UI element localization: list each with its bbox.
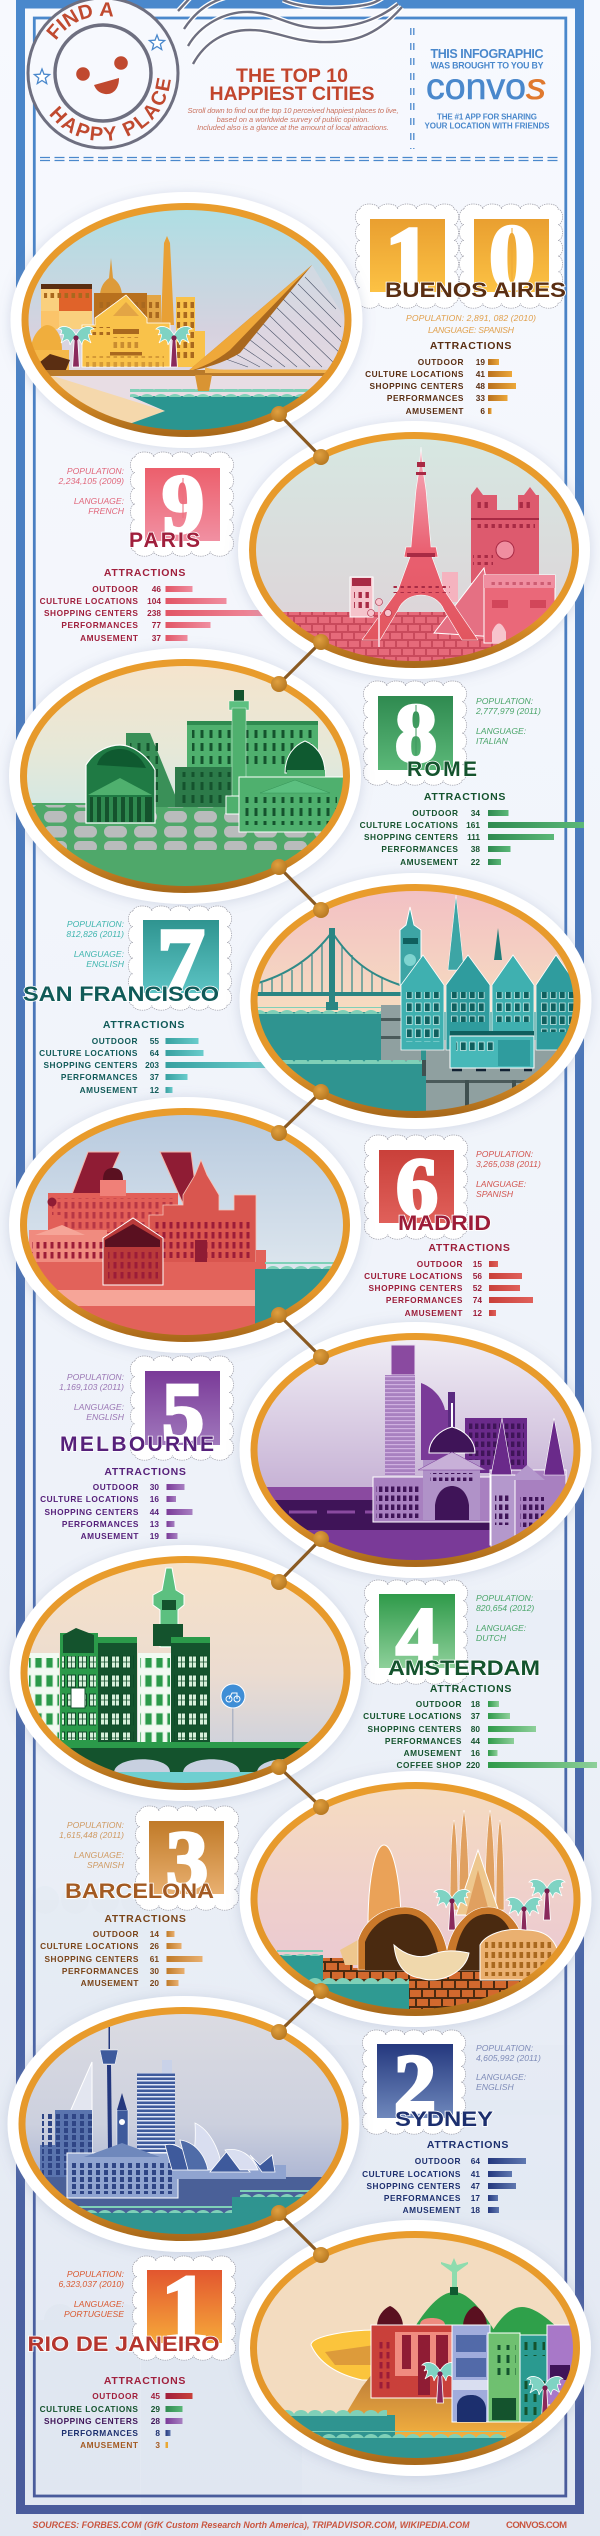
- header divider: [40, 28, 561, 160]
- attractions chart: [40, 1466, 192, 1541]
- attractions chart: OUTDOOR: [93, 1929, 139, 1939]
- attractions chart: SHOPPING CENTERS: [369, 381, 464, 391]
- attractions chart: ATTRACTIONS: [104, 567, 186, 579]
- population and language: ENGLISH: [476, 2082, 515, 2092]
- attractions chart: 34: [471, 808, 480, 818]
- attractions chart: SHOPPING CENTERS: [44, 1507, 139, 1517]
- city name: AMSTERDAM: [388, 1657, 540, 1680]
- sponsor block: convos: YOUR LOCATION WITH FRIENDS: [424, 122, 550, 130]
- vignette: Madrid skyline: [9, 1097, 361, 1353]
- attractions chart: ATTRACTIONS: [104, 1913, 187, 1925]
- city name: ROME: [407, 758, 477, 781]
- panel: Amsterdam: [10, 1545, 597, 1801]
- footer: sources: SOURCES: FORBES.COM (GfK Custom Research North America), TRIPADVISOR.COM, WIKIPEDIA.COM: [32, 2520, 471, 2531]
- attractions chart: CULTURE LOCATIONS: [40, 596, 138, 606]
- attractions chart: 30: [150, 1966, 159, 1976]
- attractions chart: 12: [150, 1085, 159, 1095]
- attractions chart: AMUSEMENT: [81, 1978, 139, 1988]
- attractions chart: CULTURE LOCATIONS: [40, 1941, 139, 1951]
- population and language: POPULATION:: [476, 696, 534, 706]
- population and language: PORTUGUESE: [64, 2309, 124, 2319]
- attractions chart: AMUSEMENT: [80, 2440, 138, 2450]
- attractions chart: 44: [150, 1507, 159, 1517]
- panel: Madrid: [9, 1097, 541, 1353]
- stamp: number 5: [130, 1356, 234, 1460]
- attractions chart: 80: [471, 1724, 480, 1734]
- attractions chart: CULTURE LOCATIONS: [40, 1494, 139, 1504]
- attractions chart: COFFEE SHOP: [396, 1760, 462, 1770]
- population and language: FRENCH: [88, 506, 125, 516]
- attractions chart: PERFORMANCES: [61, 620, 138, 630]
- stamp: number 2: 2: [394, 2038, 436, 2131]
- attractions chart: 52: [473, 1283, 482, 1293]
- badge: find a happy place stamp: FIND A: [46, 2, 113, 40]
- city name: PARIS: [129, 529, 200, 552]
- population and language: POPULATION: 2,891, 082 (2010): [406, 313, 536, 323]
- population and language: POPULATION:: [67, 466, 125, 476]
- population and language: 812,826 (2011): [66, 929, 124, 939]
- attractions chart: 26: [150, 1941, 159, 1951]
- stamp: number 7: [128, 906, 232, 1015]
- attractions chart: ATTRACTIONS: [427, 2139, 509, 2151]
- attractions chart: [365, 340, 516, 416]
- attractions chart: OUTDOOR: [92, 584, 138, 594]
- attractions chart: 46: [152, 584, 161, 594]
- attractions chart: OUTDOOR: [417, 1259, 463, 1269]
- intro text: Scroll down to find out the top 10 perceived happiest places to live,: [188, 106, 398, 115]
- population and language: 2,234,105 (2009): [58, 476, 124, 486]
- attractions chart: [360, 791, 584, 867]
- attractions chart: 37: [471, 1711, 480, 1721]
- vignette: Sydney skyline: [8, 1996, 360, 2252]
- intro text: [188, 106, 398, 132]
- attractions chart: ATTRACTIONS: [104, 2375, 186, 2387]
- panel: Rio de Janeiro: [28, 2220, 591, 2476]
- attractions chart: OUTDOOR: [92, 1036, 138, 1046]
- population and language: [59, 1372, 125, 1422]
- stamp: number 3: [135, 1806, 239, 1910]
- attractions chart: 104: [147, 596, 161, 606]
- city name: SAN FRANCISCO: [23, 983, 219, 1006]
- stamps: number 10: 1: [385, 208, 431, 310]
- attractions chart: ATTRACTIONS: [103, 1019, 185, 1031]
- title: HAPPIEST CITIES: [210, 83, 374, 105]
- panel: Melbourne: [40, 1322, 592, 1578]
- attractions chart: 30: [150, 1482, 159, 1492]
- attractions chart: [362, 2139, 526, 2215]
- attractions chart: SHOPPING CENTERS: [367, 1724, 462, 1734]
- population and language: 4,605,992 (2011): [476, 2053, 541, 2063]
- population and language: ENGLISH: [86, 1412, 125, 1422]
- vignette: Rome skyline: [9, 648, 364, 904]
- attractions chart: OUTDOOR: [415, 2156, 461, 2166]
- stamp: number 4: 4: [396, 1591, 438, 1684]
- attractions chart: 6: [480, 406, 485, 416]
- attractions chart: AMUSEMENT: [405, 1308, 463, 1318]
- city name: RIO DE JANEIRO: [28, 2333, 220, 2356]
- attractions chart: 74: [473, 1295, 482, 1305]
- attractions chart: 20: [150, 1978, 159, 1988]
- population and language: LANGUAGE:: [74, 1850, 125, 1860]
- attractions chart: 22: [471, 857, 480, 867]
- attractions chart: SHOPPING CENTERS: [43, 1060, 138, 1070]
- sponsor block: convos: THIS INFOGRAPHIC: [430, 47, 544, 61]
- attractions chart: PERFORMANCES: [386, 1295, 463, 1305]
- attractions chart: 12: [473, 1308, 482, 1318]
- badge: find a happy place stamp: [26, 0, 180, 150]
- stamp: number 9: [130, 452, 234, 556]
- attractions chart: 17: [471, 2193, 480, 2203]
- population and language: LANGUAGE:: [476, 726, 527, 736]
- panel: Sydney: [8, 1996, 541, 2252]
- attractions chart: ATTRACTIONS: [430, 1683, 512, 1695]
- attractions chart: OUTDOOR: [416, 1699, 462, 1709]
- stamp: number 4: [364, 1580, 468, 1684]
- attractions chart: 161: [466, 820, 480, 830]
- population and language: 1,169,103 (2011): [59, 1382, 124, 1392]
- attractions chart: OUTDOOR: [92, 2391, 138, 2401]
- attractions chart: 37: [150, 1072, 159, 1082]
- attractions chart: [40, 1913, 202, 1988]
- attractions chart: AMUSEMENT: [403, 2205, 461, 2215]
- attractions chart: 41: [471, 2169, 480, 2179]
- attractions chart: 15: [473, 1259, 482, 1269]
- attractions chart: 18: [471, 1699, 480, 1709]
- vignette: Melbourne skyline: [240, 1322, 592, 1578]
- stamp: number 2: [362, 2030, 466, 2134]
- attractions chart: PERFORMANCES: [381, 844, 458, 854]
- attractions chart: 55: [150, 1036, 159, 1046]
- stamp: number 6: 6: [396, 1141, 438, 1234]
- attractions chart: PERFORMANCES: [62, 1519, 139, 1529]
- attractions chart: AMUSEMENT: [80, 633, 138, 643]
- attractions chart: 14: [150, 1929, 159, 1939]
- attractions chart: SHOPPING CENTERS: [364, 832, 458, 842]
- attractions chart: SHOPPING CENTERS: [368, 1283, 463, 1293]
- attractions chart: CULTURE LOCATIONS: [362, 2169, 461, 2179]
- panel: Barcelona: [40, 1771, 592, 2027]
- attractions chart: PERFORMANCES: [385, 1736, 462, 1746]
- population and language: [66, 919, 125, 969]
- sponsor block: convos: THE #1 APP FOR SHARING: [437, 112, 537, 122]
- attractions chart: AMUSEMENT: [404, 1748, 462, 1758]
- population and language: [58, 466, 125, 516]
- attractions chart: 45: [151, 2391, 160, 2401]
- city name: BARCELONA: [65, 1880, 214, 1903]
- sponsor block: convos: [424, 47, 550, 130]
- attractions chart: OUTDOOR: [93, 1482, 139, 1492]
- vignette: San Francisco skyline: [240, 873, 592, 1129]
- population and language: LANGUAGE:: [476, 1623, 527, 1633]
- sponsor block: convos: s: [526, 66, 546, 107]
- badge: find a happy place stamp: HAPPY PLACE: [50, 78, 171, 141]
- population and language: 3,265,038 (2011): [476, 1159, 541, 1169]
- population and language: LANGUAGE:: [74, 949, 125, 959]
- attractions chart: 28: [151, 2416, 160, 2426]
- stamp: number 8: 8: [395, 687, 437, 780]
- vignette: Amsterdam skyline: [10, 1545, 362, 1801]
- attractions chart: 48: [476, 381, 485, 391]
- population and language: POPULATION:: [476, 1593, 534, 1603]
- stamp: number 5: 5: [162, 1366, 204, 1459]
- attractions chart: CULTURE LOCATIONS: [40, 2404, 138, 2414]
- attractions chart: AMUSEMENT: [400, 857, 458, 867]
- population and language: POPULATION:: [476, 1149, 534, 1159]
- attractions chart: 64: [471, 2156, 480, 2166]
- attractions chart: 47: [471, 2181, 480, 2191]
- population and language: [406, 313, 536, 335]
- population and language: 6,323,037 (2010): [59, 2279, 124, 2289]
- attractions chart: 56: [473, 1271, 482, 1281]
- vignette: Buenos Aires skyline: [10, 192, 362, 448]
- intro text: Included also is a glance at the amount of local attractions.: [197, 123, 389, 132]
- population and language: LANGUAGE:: [476, 1179, 527, 1189]
- sponsor block: convos: WAS BROUGHT TO YOU BY: [430, 60, 544, 70]
- stamp: number 8: [363, 681, 467, 785]
- population and language: [59, 1820, 125, 1870]
- attractions chart: PERFORMANCES: [61, 2428, 138, 2438]
- attractions chart: 13: [150, 1519, 159, 1529]
- attractions chart: ATTRACTIONS: [428, 1242, 511, 1254]
- population and language: POPULATION:: [67, 919, 125, 929]
- attractions chart: 19: [150, 1531, 159, 1541]
- attractions chart: ATTRACTIONS: [104, 1466, 187, 1478]
- stamp: number 3: 3: [166, 1814, 208, 1907]
- population and language: ITALIAN: [476, 736, 509, 746]
- stamp: number 1: [132, 2255, 236, 2362]
- title: THE TOP 10: [236, 65, 348, 87]
- attractions chart: [39, 1019, 266, 1095]
- population and language: POPULATION:: [476, 2043, 534, 2053]
- attractions chart: SHOPPING CENTERS: [44, 608, 138, 618]
- attractions chart: 29: [151, 2404, 160, 2414]
- population and language: [475, 696, 541, 746]
- population and language: 820,654 (2012): [476, 1603, 534, 1613]
- city name: BUENOS AIRES: [385, 279, 566, 302]
- title: [210, 65, 374, 105]
- population and language: [476, 2043, 541, 2092]
- population and language: POPULATION:: [67, 2269, 125, 2279]
- stamp: number 1: 1: [161, 2255, 209, 2362]
- population and language: 2,777,979 (2011): [475, 706, 541, 716]
- attractions chart: 77: [152, 620, 161, 630]
- panel: San Francisco: [23, 873, 592, 1129]
- population and language: SPANISH: [87, 1860, 125, 1870]
- attractions chart: AMUSEMENT: [406, 406, 464, 416]
- attractions chart: 38: [471, 844, 480, 854]
- population and language: LANGUAGE:: [74, 496, 125, 506]
- attractions chart: 44: [471, 1736, 480, 1746]
- attractions chart: 41: [476, 369, 485, 379]
- population and language: LANGUAGE: SPANISH: [428, 325, 515, 335]
- stamps: number 10: 0: [489, 206, 535, 308]
- population and language: [59, 2269, 125, 2319]
- attractions chart: CULTURE LOCATIONS: [365, 369, 464, 379]
- stamp: number 6: [364, 1135, 468, 1239]
- stamps: number 10: [355, 204, 563, 310]
- attractions chart: 16: [471, 1748, 480, 1758]
- attractions chart: PERFORMANCES: [387, 393, 464, 403]
- population and language: POPULATION:: [67, 1372, 125, 1382]
- population and language: 1,615,448 (2011): [59, 1830, 124, 1840]
- population and language: LANGUAGE:: [476, 2072, 527, 2082]
- attractions chart: [364, 1242, 533, 1318]
- sponsor block: convos: convo: [426, 66, 526, 107]
- attractions chart: OUTDOOR: [418, 357, 464, 367]
- attractions chart: CULTURE LOCATIONS: [364, 1271, 463, 1281]
- population and language: [476, 1593, 534, 1643]
- attractions chart: AMUSEMENT: [80, 1085, 138, 1095]
- attractions chart: [40, 2375, 192, 2450]
- attractions chart: PERFORMANCES: [61, 1072, 138, 1082]
- city name: SYDNEY: [395, 2108, 493, 2131]
- vignette: Paris skyline: [238, 421, 590, 679]
- attractions chart: 18: [471, 2205, 480, 2215]
- attractions chart: CULTURE LOCATIONS: [363, 1711, 462, 1721]
- attractions chart: 203: [145, 1060, 159, 1070]
- attractions chart: 33: [476, 393, 485, 403]
- attractions chart: ATTRACTIONS: [430, 340, 512, 352]
- stamp: number 7: 7: [157, 908, 205, 1015]
- population and language: DUTCH: [476, 1633, 507, 1643]
- attractions chart: PERFORMANCES: [62, 1966, 139, 1976]
- attractions chart: 111: [467, 832, 480, 842]
- attractions chart: 238: [147, 608, 161, 618]
- footer: website: CONVOS.COM: [506, 2520, 567, 2531]
- attractions chart: 8: [155, 2428, 160, 2438]
- population and language: LANGUAGE:: [74, 2299, 125, 2309]
- attractions chart: 61: [150, 1954, 159, 1964]
- attractions chart: PERFORMANCES: [384, 2193, 461, 2203]
- attractions chart: CULTURE LOCATIONS: [360, 820, 458, 830]
- attractions chart: 16: [150, 1494, 159, 1504]
- attractions chart: SHOPPING CENTERS: [44, 2416, 138, 2426]
- attractions chart: SHOPPING CENTERS: [44, 1954, 139, 1964]
- population and language: SPANISH: [476, 1189, 514, 1199]
- population and language: [476, 1149, 541, 1199]
- attractions chart: 19: [476, 357, 485, 367]
- stamp: number 9: 9: [162, 458, 204, 551]
- attractions chart: AMUSEMENT: [81, 1531, 139, 1541]
- attractions chart: 37: [152, 633, 161, 643]
- panel: Rome: [9, 648, 584, 904]
- population and language: POPULATION:: [67, 1820, 125, 1830]
- postmark wavy lines: [178, 0, 402, 64]
- attractions chart: 64: [150, 1048, 159, 1058]
- panel: Buenos Aires: [10, 192, 566, 448]
- population and language: ENGLISH: [86, 959, 125, 969]
- vignette: Barcelona skyline: [240, 1771, 592, 2027]
- intro text: based on a worldwide survey of public opinion.: [217, 115, 369, 124]
- attractions chart: CULTURE LOCATIONS: [39, 1048, 138, 1058]
- panel: Paris: [40, 421, 590, 679]
- connectors between city vignettes: [271, 406, 329, 2263]
- population and language: LANGUAGE:: [74, 1402, 125, 1412]
- attractions chart: SHOPPING CENTERS: [366, 2181, 461, 2191]
- attractions chart: OUTDOOR: [412, 808, 458, 818]
- attractions chart: ATTRACTIONS: [424, 791, 506, 803]
- attractions chart: 3: [155, 2440, 160, 2450]
- attractions chart: [363, 1683, 597, 1770]
- city name: MADRID: [398, 1212, 491, 1235]
- attractions chart: 220: [466, 1760, 480, 1770]
- vignette: Rio de Janeiro skyline: [239, 2220, 591, 2476]
- city name: MELBOURNE: [60, 1433, 214, 1456]
- attractions chart: [40, 567, 266, 643]
